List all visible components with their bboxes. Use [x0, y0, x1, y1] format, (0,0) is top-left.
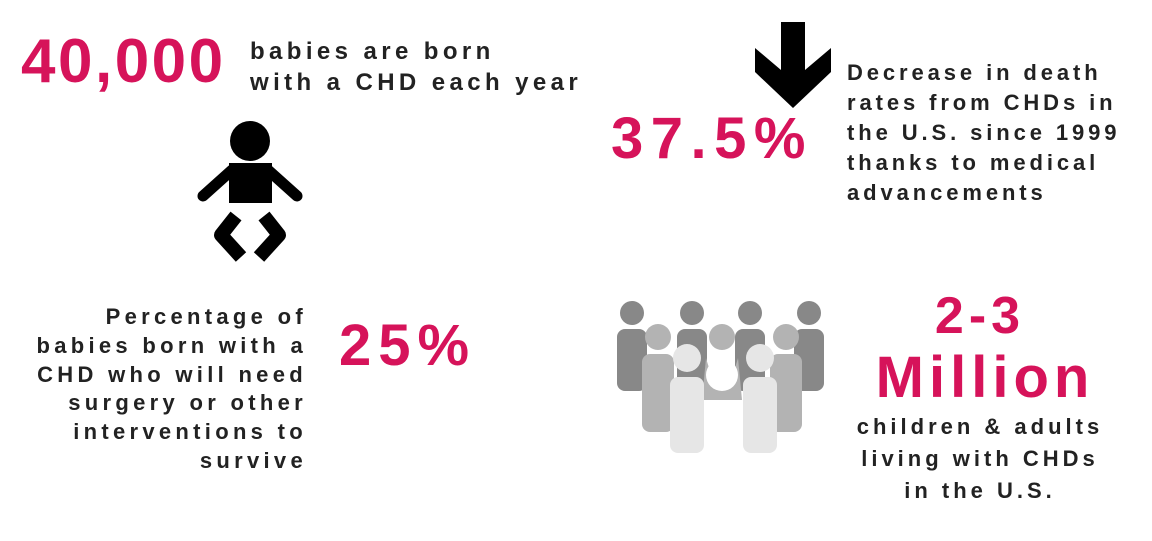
- text: decrease: [847, 60, 1120, 205]
- text: decrease: the U.S. since 1999: [847, 120, 1120, 145]
- text: percentage: interventions to: [73, 419, 307, 444]
- text: children & adults: living with CHDs: [861, 446, 1099, 471]
- icon: baby: [198, 121, 302, 262]
- text: percentage: Percentage of: [106, 304, 307, 329]
- text: Million: [876, 345, 1094, 410]
- text: percentage: CHD who will need: [37, 362, 307, 387]
- stat: 25%: 25%: [339, 313, 476, 378]
- text: babies born: [250, 38, 582, 96]
- icon: crowd: [617, 301, 824, 453]
- text: babies born: babies are born: [250, 38, 495, 65]
- text: decrease: rates from CHDs in: [847, 90, 1116, 115]
- stat: 2-3 Million: 2-3: [935, 287, 1025, 345]
- icon: down arrow: [755, 22, 831, 108]
- stat: 40,000: 40,000: [21, 27, 226, 96]
- stat: 37.5%: 37.5%: [611, 106, 813, 171]
- text: decrease: thanks to medical: [847, 150, 1099, 175]
- text: percentage: surgery or other: [68, 390, 307, 415]
- text: decrease: advancements: [847, 180, 1047, 205]
- text: percentage: babies born with a: [36, 333, 307, 358]
- text: percentage: survive: [200, 448, 307, 473]
- text: children & adults: in the U.S.: [904, 478, 1056, 503]
- text: decrease: Decrease in death: [847, 60, 1102, 85]
- text: percentage: [36, 304, 307, 473]
- text: babies born: with a CHD each year: [250, 69, 582, 96]
- text: children & adults: children & adults: [857, 414, 1103, 439]
- text: children & adults: [857, 414, 1103, 503]
